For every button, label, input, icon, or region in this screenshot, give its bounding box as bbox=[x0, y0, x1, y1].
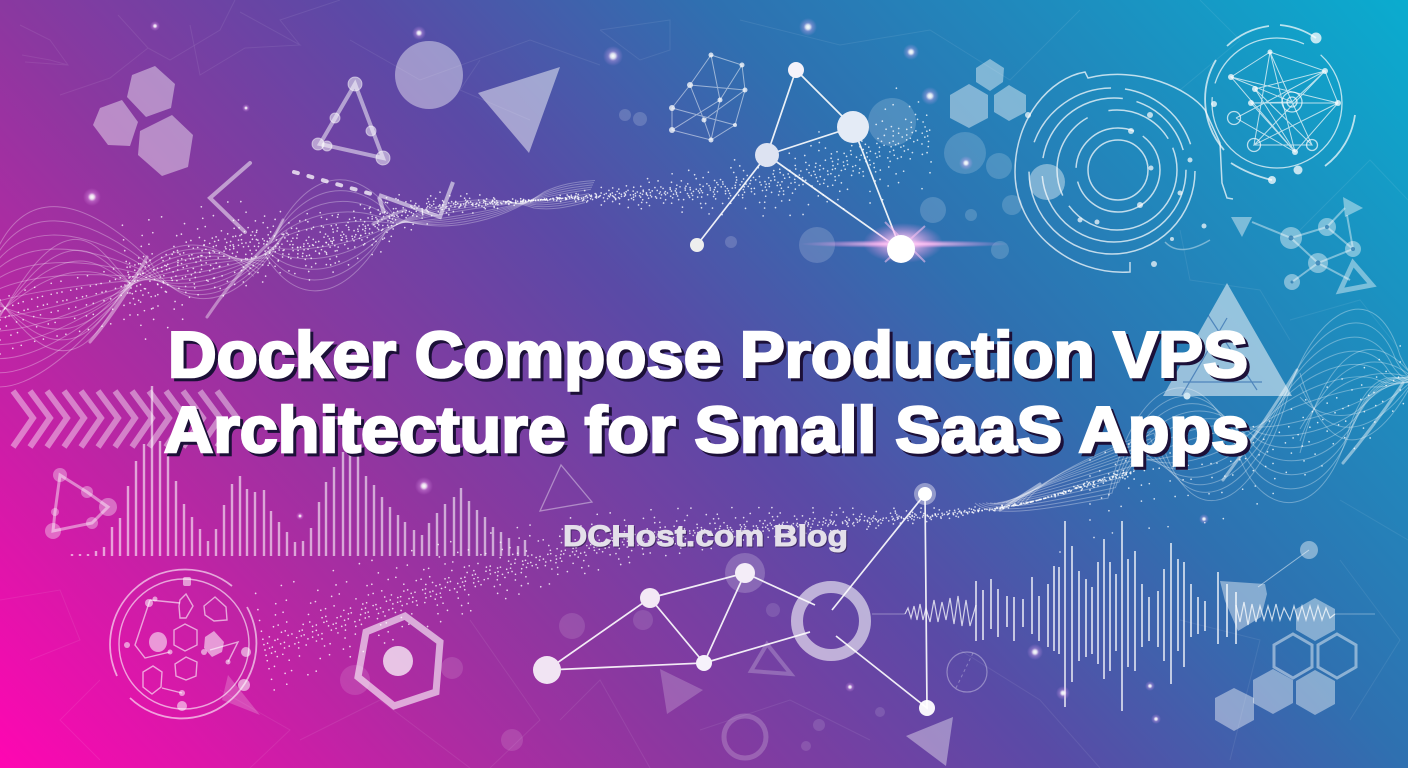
small network right with triangles bbox=[1231, 197, 1372, 291]
wave bundle left bbox=[0, 137, 595, 396]
polygon blob and node near waveform bbox=[1220, 541, 1318, 631]
subtitle: DCHost.com Blog bbox=[563, 520, 848, 553]
circular hexagon diagram bottom left bbox=[110, 569, 256, 718]
main node network with glow bbox=[690, 62, 1010, 263]
outlined triangle mid bbox=[540, 465, 592, 511]
network circle top right bbox=[1205, 25, 1355, 184]
chevron bracket bbox=[210, 163, 250, 232]
small network upper middle bbox=[669, 52, 748, 142]
bar chart bbox=[72, 386, 525, 556]
faint bottom shapes bbox=[340, 553, 885, 751]
bottom outlines bbox=[724, 644, 987, 758]
wave bundle right bbox=[975, 276, 1408, 598]
faint bubbles bbox=[619, 98, 1065, 263]
title: Docker Compose Production VPS bbox=[168, 318, 1248, 391]
faint triangle bottom bbox=[906, 717, 953, 766]
concentric tech rings bbox=[1015, 72, 1233, 272]
hexagon cluster top bbox=[950, 59, 1026, 128]
audio waveform bbox=[872, 521, 1375, 711]
large triangle bbox=[478, 67, 560, 153]
hexagon cluster top left bbox=[93, 66, 193, 176]
triangle node network bbox=[312, 77, 390, 165]
lens flare bbox=[800, 222, 1010, 263]
particle stream upper bbox=[0, 74, 938, 354]
bottom node network with ring bbox=[533, 483, 936, 716]
hexagon ring with dot bbox=[358, 616, 440, 706]
particle stream lower bbox=[256, 340, 1408, 690]
dashed line and zigzag connector bbox=[294, 172, 453, 217]
faint triangle bottom left bbox=[222, 675, 260, 715]
small node chain left bbox=[45, 468, 117, 539]
chevron row bbox=[13, 391, 237, 447]
large circle bbox=[395, 41, 463, 109]
hexagon cluster bottom right bbox=[1215, 598, 1356, 731]
big triangle behind title bbox=[1163, 283, 1292, 400]
title bbox=[164, 318, 1249, 466]
glowing sparkles bbox=[83, 18, 1209, 724]
title: Architecture for Small SaaS Apps bbox=[164, 393, 1249, 466]
